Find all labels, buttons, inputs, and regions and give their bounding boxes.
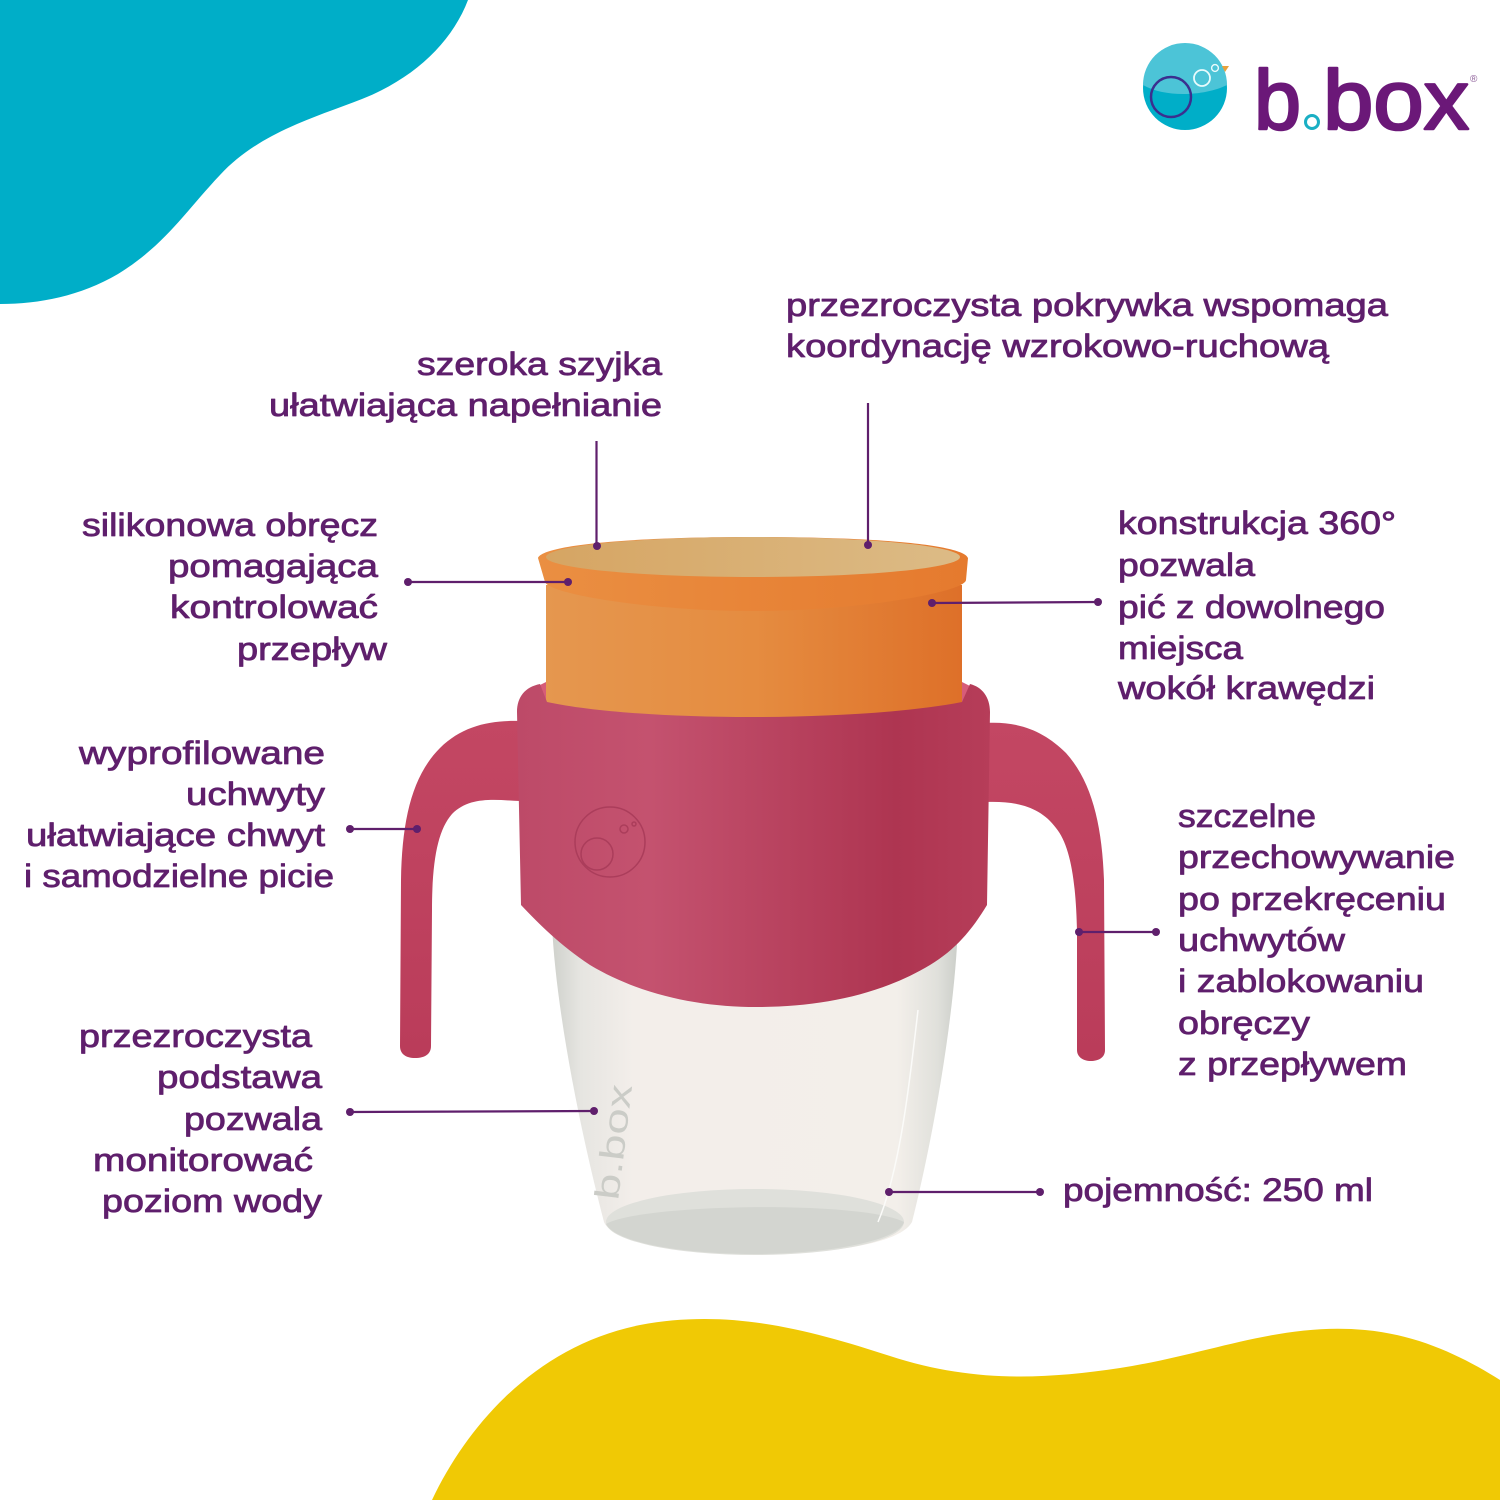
label text: silikonowa obręcz: [82, 507, 378, 543]
label text: uchwytów: [1178, 922, 1346, 958]
icon: embossed collar logo: [575, 807, 645, 877]
callout: handles: [24, 735, 421, 894]
label text: wyprofilowane: [78, 735, 325, 771]
label text: pić z dowolnego: [1118, 589, 1385, 625]
label text: pojemność: 250 ml: [1063, 1172, 1373, 1208]
cup transparent base: [552, 925, 958, 1255]
label text: [24, 735, 334, 894]
label text: przezroczysta pokrywka wspomaga: [786, 287, 1389, 323]
leader line: [928, 598, 1102, 607]
label text: po przekręceniu: [1178, 881, 1446, 917]
leader line: [593, 441, 601, 550]
callout: 360 construction: [928, 505, 1396, 706]
label text: ułatwiająca napełnianie: [269, 387, 662, 423]
pink collar back lip: [530, 682, 978, 712]
icon: bird logo: [1143, 43, 1229, 130]
callout: sealed storage: [1075, 798, 1455, 1082]
label text: [1178, 798, 1455, 1082]
callout: transparent lid: [786, 287, 1389, 549]
callout: wide neck: [269, 346, 663, 550]
leader line: [346, 825, 421, 833]
label text: z przepływem: [1178, 1046, 1407, 1082]
label text: i zablokowaniu: [1178, 963, 1424, 999]
callout: transparent base: [79, 1018, 598, 1219]
orange rim: [538, 537, 968, 611]
label text: [269, 346, 663, 423]
callout: capacity: [885, 1172, 1373, 1208]
cup embossed brand text: b.box: [588, 1082, 640, 1202]
leader line: [346, 1107, 598, 1116]
right handle: [986, 723, 1105, 1061]
label text: uchwyty: [186, 776, 326, 812]
leader line: [404, 578, 572, 586]
left handle: [400, 721, 520, 1058]
registered mark: ®: [1470, 74, 1478, 85]
background blob: teal top left: [0, 0, 468, 304]
label text: pozwala: [184, 1101, 323, 1137]
logo: b.box: [1143, 43, 1478, 147]
leader line: [885, 1188, 1044, 1196]
orange body: [546, 585, 962, 725]
label text: koordynację wzrokowo-ruchową: [786, 328, 1330, 364]
label text: szczelne: [1178, 798, 1316, 834]
label text: [786, 287, 1389, 364]
callout: silicone rim: [82, 507, 572, 667]
logo wordmark: b: [1254, 53, 1301, 147]
logo dot ring: [1306, 116, 1318, 128]
leader line: [1075, 928, 1160, 936]
logo wordmark: box: [1323, 53, 1469, 147]
label text: wokół krawędzi: [1117, 670, 1375, 706]
transparent lid: [546, 537, 960, 577]
product: b.box cup: [400, 537, 1105, 1255]
label text: [1117, 505, 1396, 706]
label text: przepływ: [237, 631, 388, 667]
label text: [82, 507, 388, 667]
label text: podstawa: [157, 1059, 323, 1095]
label text: przechowywanie: [1178, 839, 1455, 875]
label text: pomagająca: [168, 548, 379, 584]
label text: szeroka szyjka: [417, 346, 663, 382]
label text: przezroczysta: [79, 1018, 313, 1054]
label text: pozwala: [1118, 547, 1256, 583]
label text: monitorować: [93, 1142, 313, 1178]
label text: poziom wody: [102, 1183, 323, 1219]
label text: konstrukcja 360°: [1118, 505, 1396, 541]
label text: i samodzielne picie: [24, 858, 334, 894]
logo wordmark: [1254, 53, 1469, 147]
background blob: yellow bottom: [432, 1319, 1500, 1500]
label text: kontrolować: [170, 589, 378, 625]
label text: [79, 1018, 323, 1219]
label text: miejsca: [1118, 630, 1244, 666]
leader line: [864, 403, 872, 549]
pink collar: [517, 684, 990, 1007]
label text: ułatwiające chwyt: [26, 817, 325, 853]
label text: obręczy: [1178, 1005, 1311, 1041]
